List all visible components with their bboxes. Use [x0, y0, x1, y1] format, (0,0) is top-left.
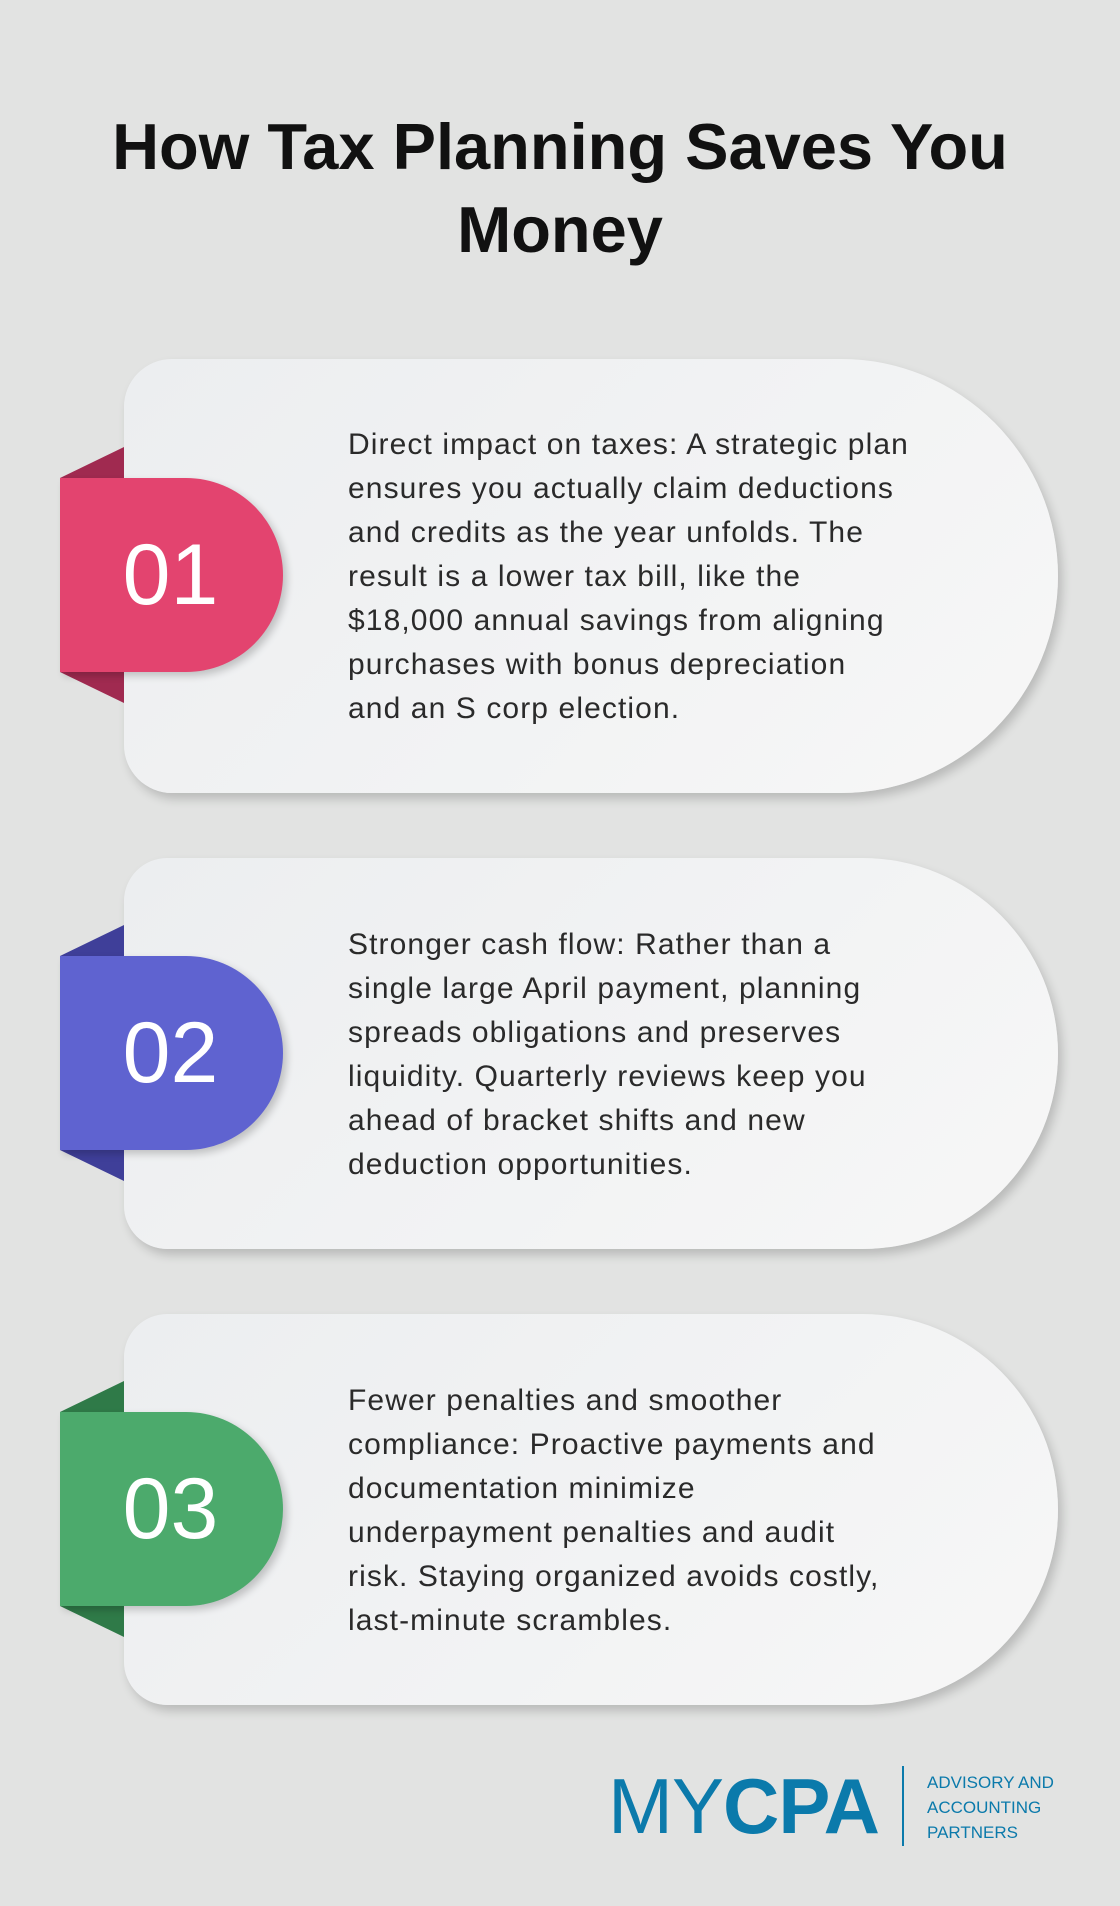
- panel: card 3: [124, 1314, 1058, 1705]
- text 3: Fewer penalties and smoother: [348, 1384, 782, 1417]
- text 3: last-minute scrambles.: [348, 1604, 672, 1637]
- logo: [608, 1762, 1054, 1850]
- badge 02: 02: [123, 1005, 218, 1101]
- logo: ADVISORY AND: [927, 1773, 1054, 1792]
- badge 01: [60, 478, 283, 672]
- fold bottom 1: [60, 672, 124, 703]
- text 1: result is a lower tax bill, like the: [348, 560, 801, 593]
- badge 03: 03: [123, 1461, 218, 1557]
- text 1: ensures you actually claim deductions: [348, 472, 894, 505]
- text 2: single large April payment, planning: [348, 972, 861, 1005]
- text 1: [348, 428, 909, 725]
- title: [112, 110, 1008, 266]
- panel: card 1: [124, 359, 1058, 793]
- text 1: purchases with bonus depreciation: [348, 648, 846, 681]
- text 1: and credits as the year unfolds. The: [348, 516, 864, 549]
- logo: MYCPA: [608, 1762, 879, 1850]
- badge 03: [60, 1412, 283, 1606]
- badge 02: [60, 956, 283, 1150]
- panel: card 2: [124, 858, 1058, 1249]
- text 3: [348, 1384, 879, 1637]
- fold top 3: [60, 1381, 124, 1412]
- badge 01: 01: [123, 527, 218, 623]
- text 3: risk. Staying organized avoids costly,: [348, 1560, 879, 1593]
- text 2: ahead of bracket shifts and new: [348, 1104, 806, 1137]
- logo: PARTNERS: [927, 1823, 1018, 1842]
- title: How Tax Planning Saves You: [112, 110, 1008, 183]
- text 2: spreads obligations and preserves: [348, 1016, 841, 1049]
- text 1: and an S corp election.: [348, 692, 680, 725]
- text 2: deduction opportunities.: [348, 1148, 693, 1181]
- text 3: documentation minimize: [348, 1472, 696, 1505]
- text 2: liquidity. Quarterly reviews keep you: [348, 1060, 867, 1093]
- fold top 2: [60, 925, 124, 956]
- title: Money: [457, 193, 663, 266]
- fold bottom 3: [60, 1606, 124, 1637]
- text 1: $18,000 annual savings from aligning: [348, 604, 885, 637]
- fold top 1: [60, 447, 124, 478]
- logo: ACCOUNTING: [927, 1798, 1041, 1817]
- text 2: Stronger cash flow: Rather than a: [348, 928, 831, 961]
- text 2: [348, 928, 867, 1181]
- text 1: Direct impact on taxes: A strategic plan: [348, 428, 909, 461]
- text 3: compliance: Proactive payments and: [348, 1428, 876, 1461]
- fold bottom 2: [60, 1150, 124, 1181]
- text 3: underpayment penalties and audit: [348, 1516, 835, 1549]
